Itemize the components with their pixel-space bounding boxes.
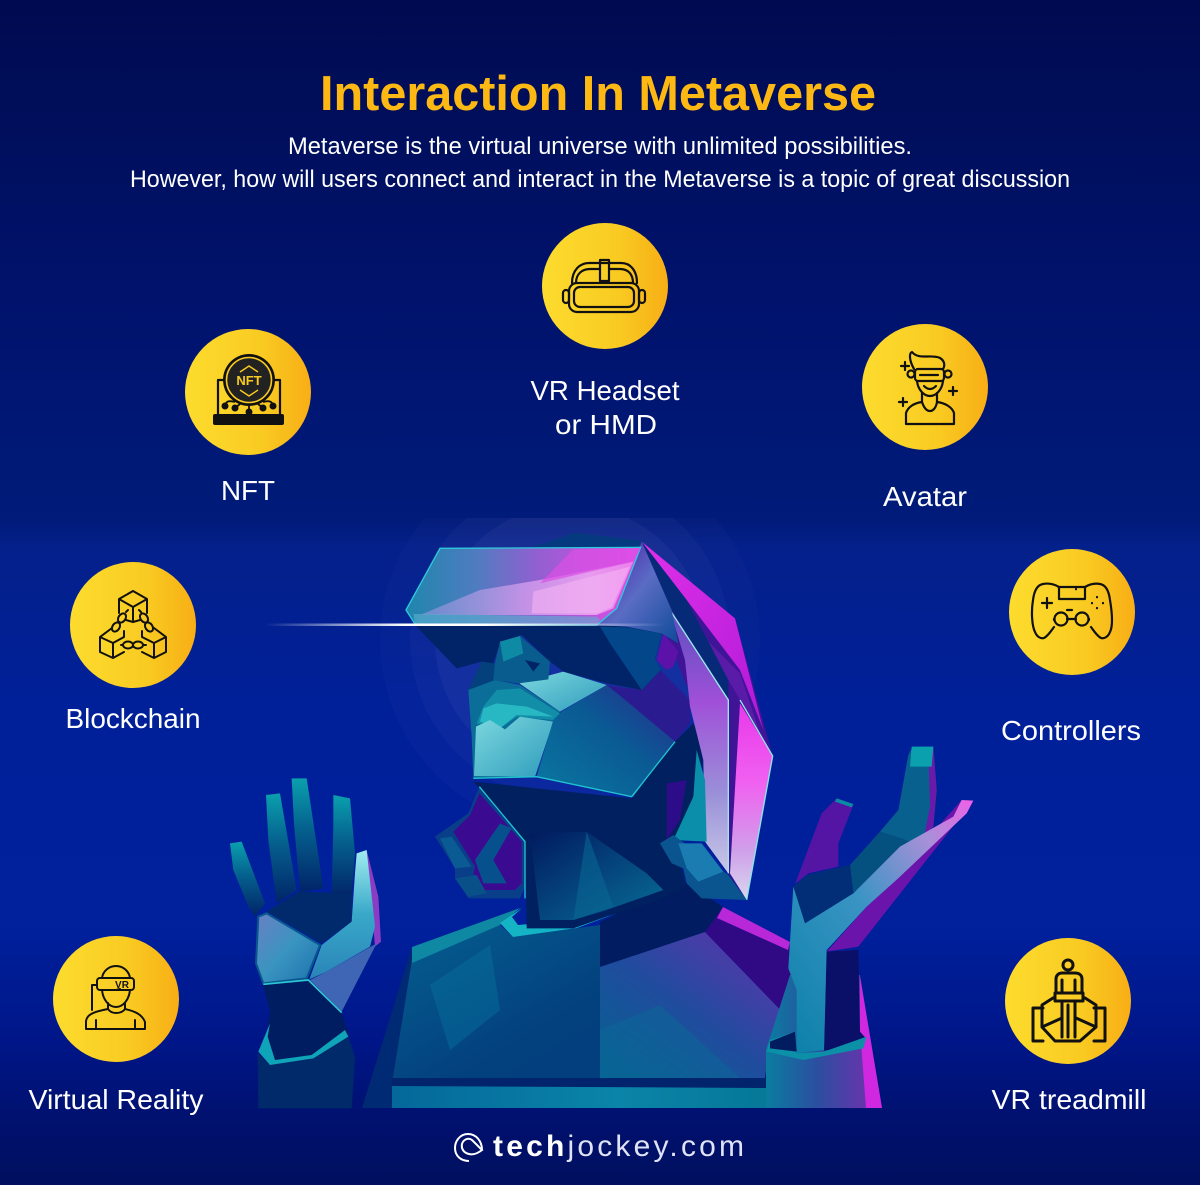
icon: VR treadmill bbox=[1033, 960, 1105, 1041]
light beam bbox=[265, 624, 665, 626]
icon: avatar bbox=[899, 352, 957, 424]
visor bbox=[406, 542, 678, 643]
face lower bbox=[468, 662, 690, 797]
icon: VR headset bbox=[563, 260, 645, 312]
label: Controllers bbox=[1001, 715, 1141, 746]
illustration: VR user bbox=[230, 450, 973, 1108]
wordmark: techjockey.com bbox=[493, 1130, 747, 1163]
label: VR Headset bbox=[530, 375, 680, 406]
nose bbox=[493, 636, 550, 683]
label: Blockchain bbox=[66, 703, 200, 734]
badge bbox=[1005, 938, 1131, 1064]
title: Interaction In Metaverse bbox=[320, 67, 876, 121]
right hand bbox=[767, 747, 973, 1060]
straps behind visor bbox=[532, 533, 773, 900]
badge bbox=[1009, 549, 1135, 675]
icon: VR person bbox=[86, 966, 145, 1029]
label: VR treadmill bbox=[992, 1084, 1146, 1115]
item: Virtual Reality bbox=[28, 936, 204, 1115]
badge bbox=[185, 329, 311, 455]
badge bbox=[542, 223, 668, 349]
icon: blockchain bbox=[100, 591, 166, 658]
item: Avatar bbox=[862, 324, 988, 512]
icon: VR person: VR bbox=[115, 980, 130, 991]
label line 2: or HMD bbox=[555, 409, 657, 440]
label: Virtual Reality bbox=[28, 1084, 204, 1115]
item: VR Headset bbox=[530, 223, 680, 440]
item: NFT bbox=[185, 329, 311, 506]
body bbox=[362, 877, 882, 1108]
left hand bbox=[230, 778, 381, 1108]
neck and shoulders of head bbox=[473, 723, 703, 928]
side panels bbox=[657, 610, 773, 900]
icon: NFT laptop: NFT bbox=[236, 373, 262, 388]
subtitle text bbox=[130, 133, 1070, 193]
subtitle text: Metaverse is the virtual universe with unlimited possibilities. bbox=[288, 133, 912, 160]
label: Avatar bbox=[883, 481, 967, 512]
head halo bbox=[410, 518, 727, 796]
left hair bbox=[435, 787, 525, 898]
icon: NFT laptop bbox=[213, 354, 284, 425]
icon: at sign bbox=[455, 1134, 482, 1161]
subtitle text: However, how will users connect and interact in the Metaverse is a topic of great discussion bbox=[130, 166, 1070, 193]
item: Controllers bbox=[1001, 549, 1141, 746]
label: NFT bbox=[221, 475, 275, 506]
under visor bbox=[415, 625, 662, 690]
badge bbox=[862, 324, 988, 450]
badge bbox=[53, 936, 179, 1062]
icon: game controller bbox=[1032, 584, 1112, 638]
item: VR treadmill bbox=[992, 938, 1146, 1115]
footer logo: techjockey.com bbox=[455, 1130, 747, 1163]
head bbox=[406, 533, 773, 928]
badge bbox=[70, 562, 196, 688]
item: Blockchain bbox=[66, 562, 200, 734]
